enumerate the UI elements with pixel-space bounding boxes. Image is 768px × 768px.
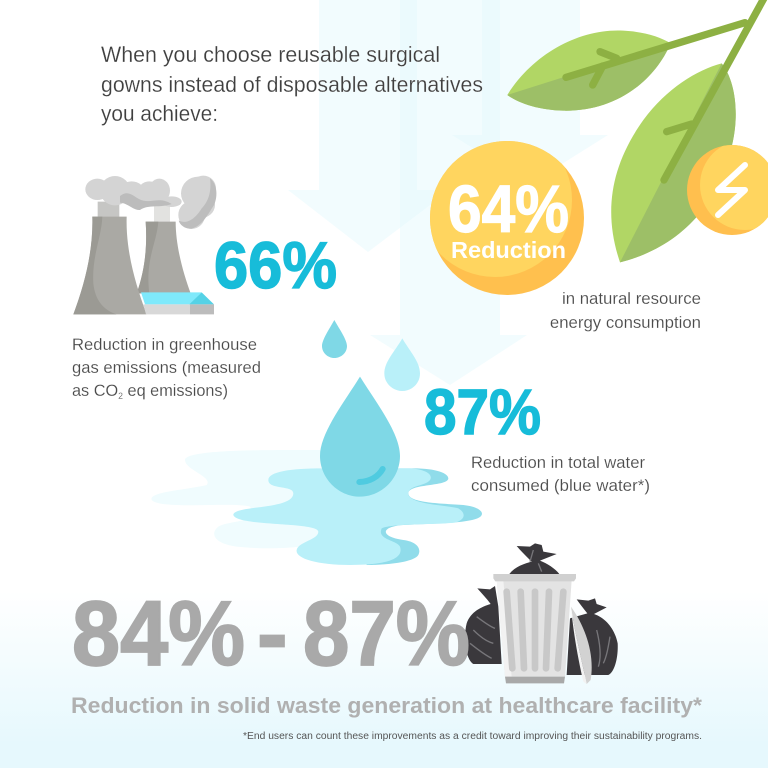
background arrows	[288, 0, 608, 385]
stat: 87%: 87%	[424, 376, 541, 448]
back bag	[509, 543, 559, 574]
main puddle	[233, 468, 464, 565]
big drop	[320, 377, 400, 497]
text: greenhouse gas	[72, 335, 261, 401]
light drop	[384, 338, 420, 391]
big stat: 84% - 87%: 87%	[303, 583, 470, 685]
stat circle: 64% reduction	[430, 141, 584, 295]
right bag	[567, 598, 618, 675]
puddle shadow	[350, 468, 482, 565]
text: water consumed	[471, 453, 650, 495]
text: natural resource: in natural resource	[562, 289, 701, 308]
can rim	[493, 574, 576, 581]
stat circle: 64% reduction: Reduction	[451, 237, 566, 263]
big stat: 84% - 87%: -	[257, 583, 288, 685]
icon: water puddle and drops	[151, 320, 482, 565]
text: greenhouse gas: eq emissions)	[123, 381, 228, 400]
heading	[101, 42, 483, 126]
upper leaf	[507, 31, 671, 111]
text: greenhouse gas: as CO	[72, 381, 120, 400]
heading: When you choose reusable surgical	[101, 42, 440, 67]
icon: factory cooling towers	[73, 176, 216, 314]
stat circle: 64% reduction: 64%	[448, 172, 569, 247]
lower leaf	[611, 63, 736, 262]
big stat: 84% - 87%	[72, 583, 470, 685]
icon: trash can with bags	[465, 543, 618, 684]
text: greenhouse gas: Reduction in greenhouse	[72, 335, 257, 354]
stat: 66%: 66%	[214, 228, 337, 302]
icon: leaves	[507, 0, 767, 262]
text: greenhouse gas: 2	[118, 391, 123, 401]
text: greenhouse gas: gas emissions (measured	[72, 358, 261, 377]
can body	[497, 580, 572, 677]
branches	[566, 0, 767, 180]
left bag	[465, 586, 502, 664]
small drop	[322, 320, 347, 358]
text: water consumed: consumed (blue water*)	[471, 476, 650, 495]
text: water consumed: Reduction in total water	[471, 453, 645, 472]
heading: gowns instead of disposable alternatives	[101, 72, 483, 97]
text: natural resource	[550, 289, 701, 332]
text: natural resource: energy consumption	[550, 313, 701, 332]
pale puddle	[151, 450, 337, 548]
subheading: solid waste: Reduction in solid waste generation at healthcare facility*	[71, 693, 702, 718]
icon: energy coin	[687, 140, 768, 235]
big stat: 84% - 87%: 84%	[72, 583, 245, 685]
lid	[571, 607, 592, 684]
heading: you achieve:	[101, 101, 218, 126]
footnote: *End users can count these improvements as a credit toward improving their sustainability programs.	[243, 731, 702, 742]
